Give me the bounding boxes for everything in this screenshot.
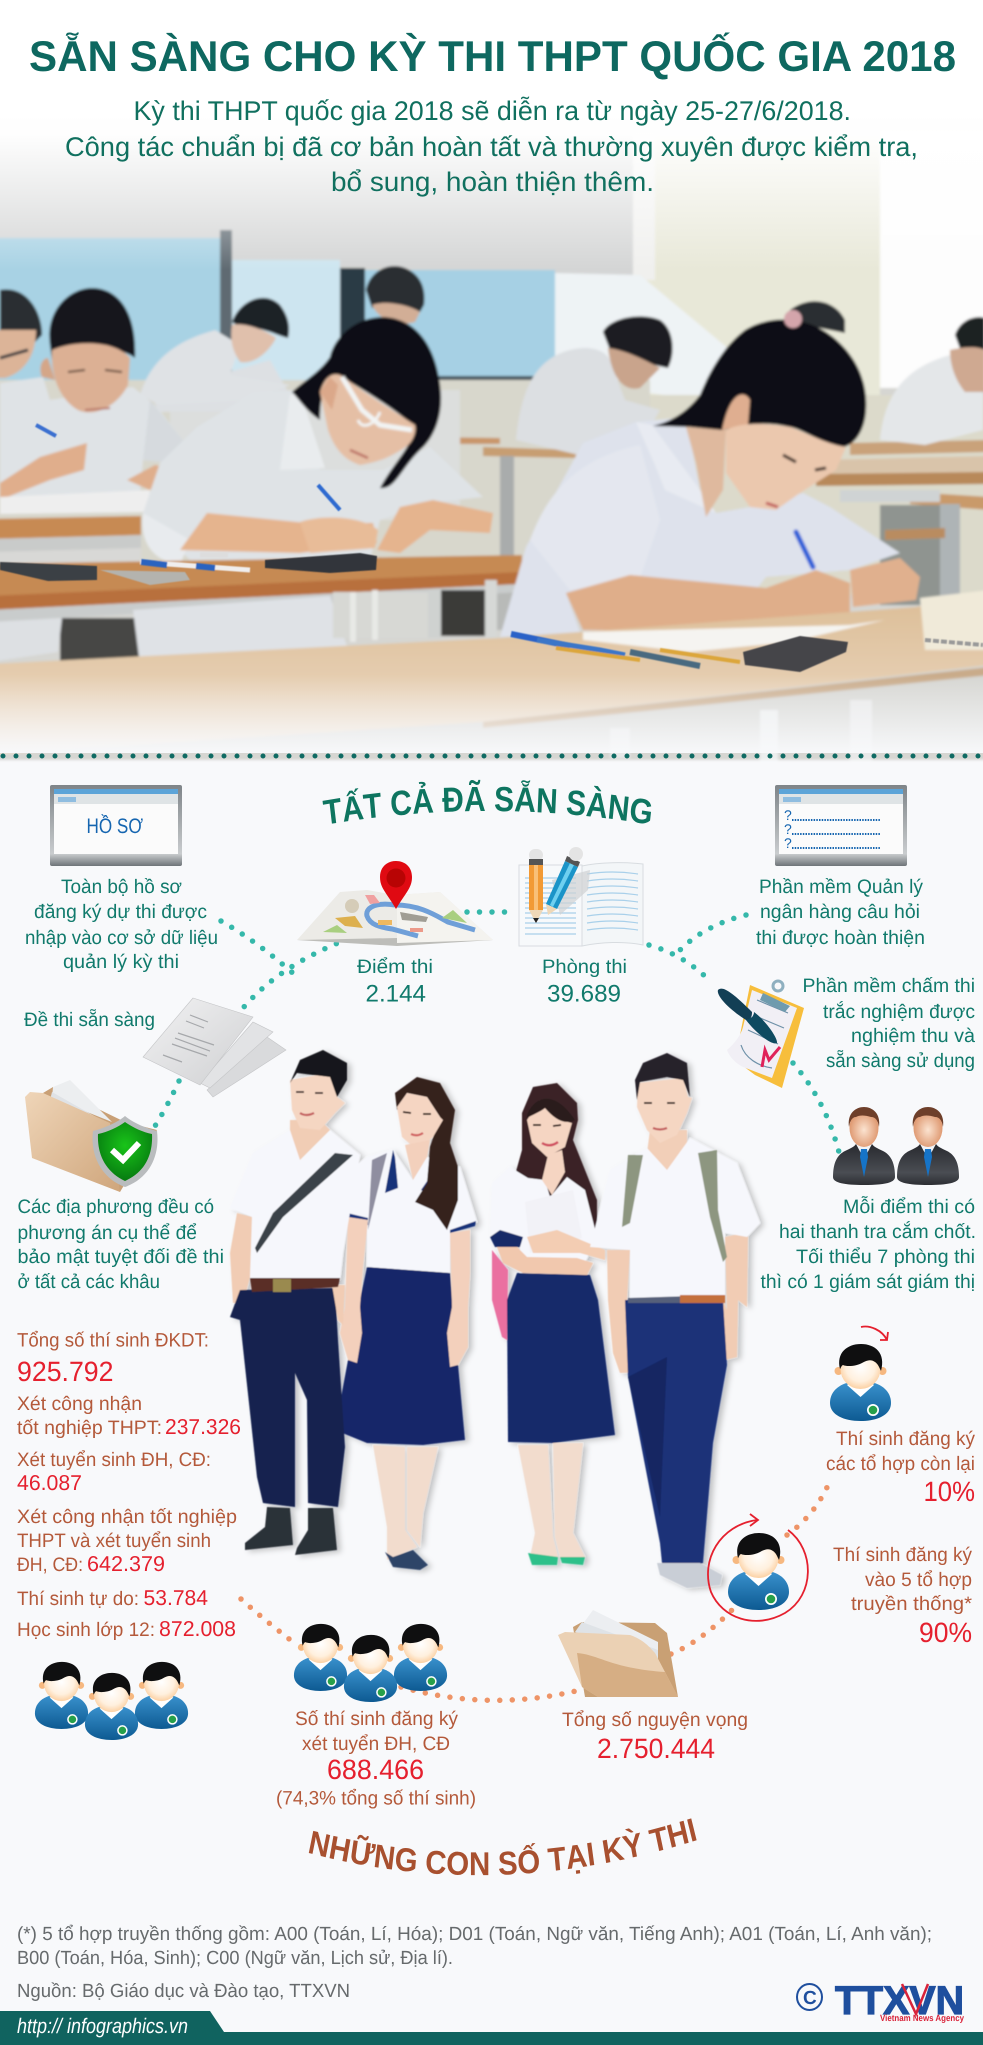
student: female C (490, 1083, 615, 1565)
text: candidate numbers: 53.784 (144, 1586, 208, 1610)
text: candidate numbers (17, 1330, 241, 1641)
footnote: (*) 5 tổ hợp truyền thống gồm: A00 (Toán, Lí, Hóa); D01 (Toán, Ngữ văn, Tiếng Anh); A01 (Toán, Lí, Anh văn); (17, 1924, 932, 1945)
text: question bank software: ngân hàng câu hỏi (760, 901, 920, 923)
text: total wishes: 2.750.444 (597, 1733, 715, 1764)
footnote: B00 (Toán, Hóa, Sinh); C00 (Ngữ văn, Lịch sử, Địa lí). (17, 1948, 453, 1969)
text: marking software: Phần mềm chấm thi (802, 975, 975, 997)
text: traditional combinations: Thí sinh đăng ký (833, 1544, 972, 1566)
text: exam sites: 2.144 (366, 980, 426, 1008)
intro text: Kỳ thi THPT quốc gia 2018 sẽ diễn ra từ ngày 25-27/6/2018. (134, 96, 851, 126)
text: candidate numbers: Học sinh lớp 12: (17, 1619, 155, 1641)
text: other subject combinations (826, 1428, 975, 1507)
icon: exam papers (143, 998, 286, 1097)
text: exam rooms (542, 956, 627, 1008)
icon: candidate in red circle (708, 1514, 808, 1621)
text: candidate numbers: Xét công nhận (17, 1393, 142, 1415)
text: security: phương án cụ thể để (18, 1222, 197, 1244)
icon: clipboard with pen (718, 981, 804, 1088)
text: inspectors (760, 1196, 976, 1293)
dotted divider (3, 754, 983, 758)
icon: three candidates centre (294, 1624, 447, 1702)
text: candidate numbers: Xét công nhận tốt nghiệp (17, 1506, 237, 1528)
text: registered candidates: 688.466 (327, 1754, 424, 1785)
right student pen (796, 532, 813, 567)
title: SẴN SÀNG CHO KỲ THI THPT QUỐC GIA 2018 (29, 32, 956, 81)
text: inspectors: Mỗi điểm thi có (843, 1196, 975, 1218)
text: security: bảo mật tuyệt đối đề thi (18, 1246, 224, 1268)
student: male A (230, 1050, 360, 1555)
center student (143, 390, 483, 560)
text: security (18, 1196, 224, 1293)
text: candidate numbers: 46.087 (17, 1471, 82, 1495)
icon: window questions: ? (784, 821, 792, 837)
icon: window HỒ SƠ: HỒ SƠ (86, 814, 143, 838)
left desk (0, 516, 141, 539)
right student arms (566, 570, 850, 630)
text: question bank software (756, 876, 925, 949)
text: other subject combinations: các tổ hợp còn lại (826, 1453, 975, 1475)
text: traditional combinations: 90% (919, 1617, 972, 1648)
teal connector dots (155, 912, 850, 1185)
icon: window questions (775, 785, 907, 866)
icon: open book with pencils (519, 847, 643, 946)
text: total wishes: Tổng số nguyện vọng (562, 1709, 748, 1731)
right student (500, 417, 900, 637)
student: female B (335, 1077, 477, 1570)
icon: three candidates left (35, 1662, 188, 1740)
text: security: ở tất cả các khâu (18, 1271, 160, 1293)
text: candidate numbers: 925.792 (17, 1356, 114, 1387)
text: other subject combinations: 10% (924, 1476, 975, 1507)
text: records: Toàn bộ hồ sơ (61, 876, 182, 898)
icon: window HỒ SƠ (50, 785, 182, 866)
text: security: Các địa phương đều có (18, 1196, 214, 1218)
text: inspectors: hai thanh tra cắm chốt. (779, 1221, 976, 1243)
intro text (65, 96, 918, 197)
text: registered candidates (276, 1708, 476, 1810)
text: marking software (802, 975, 975, 1072)
text: registered candidates: Số thí sinh đăng ký (295, 1708, 458, 1730)
orange connector dots (241, 1483, 829, 1700)
text: question bank software: thi được hoàn thiện (756, 927, 925, 949)
footer bar (0, 2011, 983, 2045)
text: marking software: trắc nghiệm được (823, 1001, 975, 1023)
icon: candidate with small arrow (830, 1327, 891, 1421)
footer bar: http:// infographics.vn (17, 2015, 188, 2038)
text: records: quản lý kỳ thi (63, 951, 179, 973)
text: candidate numbers: Xét tuyển sinh ĐH, CĐ: (17, 1449, 211, 1471)
heading: all ready: TẤT CẢ ĐÃ SẴN SÀNG (322, 780, 652, 824)
text: exam sites: Điểm thi (357, 956, 433, 978)
text: candidate numbers: 642.379 (87, 1552, 165, 1576)
text: exam rooms: Phòng thi (542, 956, 627, 978)
text: inspectors: thì có 1 giám sát giám thị (760, 1271, 975, 1293)
text: registered candidates: (74,3% tổng số thí sinh) (276, 1788, 476, 1810)
rear right desks (483, 447, 576, 458)
icon: window questions: ? (784, 807, 792, 823)
student: male D (590, 1053, 760, 1588)
text: traditional combinations (833, 1544, 972, 1648)
text: records: đăng ký dự thi được (34, 901, 207, 923)
text: total wishes (562, 1709, 748, 1764)
middle desk (0, 555, 522, 608)
left student (0, 377, 185, 500)
logo: TTXVN: C (803, 1988, 817, 2009)
text: candidate numbers: 237.326 (165, 1415, 241, 1439)
icon: two inspectors (833, 1107, 959, 1185)
text: marking software: nghiệm thu và (851, 1025, 975, 1047)
intro text: Công tác chuẩn bị đã cơ bản hoàn tất và thường xuyên được kiểm tra, (65, 132, 918, 162)
footnote (17, 1924, 932, 1969)
icon: tan folder (558, 1610, 678, 1697)
photo: students taking the exam (0, 0, 983, 760)
text: exam rooms: 39.689 (547, 980, 621, 1008)
logo: TTXVN: TTXVN (835, 1979, 964, 2023)
source: Nguồn: Bộ Giáo dục và Đào tạo, TTXVN (17, 1981, 350, 2002)
icon: window questions: ? (784, 835, 792, 851)
icon: folder with shield (25, 1080, 158, 1192)
text: records: nhập vào cơ sở dữ liệu (25, 927, 218, 949)
logo: TTXVN: Vietnam News Agency (880, 2013, 964, 2023)
room (0, 120, 983, 760)
text: other subject combinations: Thí sinh đăng ký (836, 1428, 975, 1450)
icon: map with pin (297, 861, 493, 946)
text: registered candidates: xét tuyển ĐH, CĐ (302, 1733, 450, 1755)
text: exam paper ready: Đề thi sẵn sàng (24, 1009, 155, 1031)
text: traditional combinations: truyền thống* (851, 1593, 972, 1615)
text: candidate numbers: Thí sinh tự do: (17, 1588, 139, 1610)
text: exam sites (357, 956, 433, 1008)
text: question bank software: Phần mềm Quản lý (759, 876, 923, 898)
text: traditional combinations: vào 5 tổ hợp (865, 1569, 972, 1591)
under middle desk (60, 618, 140, 666)
heading: the numbers: NHỮNG CON SỐ TẠI KỲ THI (308, 1818, 697, 1876)
text: candidate numbers: Tổng số thí sinh ĐKDT: (17, 1330, 209, 1352)
text: inspectors: Tối thiểu 7 phòng thi (796, 1246, 975, 1268)
text: candidate numbers: 872.008 (159, 1617, 236, 1641)
desk items (0, 425, 983, 672)
text: marking software: sẵn sàng sử dụng (826, 1050, 975, 1072)
rear students (0, 289, 42, 345)
center student arms (180, 513, 377, 553)
text: candidate numbers: tốt nghiệp THPT: (17, 1417, 162, 1439)
text: records (25, 876, 218, 973)
intro text: bổ sung, hoàn thiện thêm. (331, 167, 654, 197)
text: candidate numbers: ĐH, CĐ: (17, 1554, 83, 1576)
front desk (0, 592, 983, 755)
center student hair and face (292, 317, 441, 488)
photo: four students (230, 1050, 760, 1588)
text: candidate numbers: THPT và xét tuyển sinh (17, 1530, 211, 1552)
